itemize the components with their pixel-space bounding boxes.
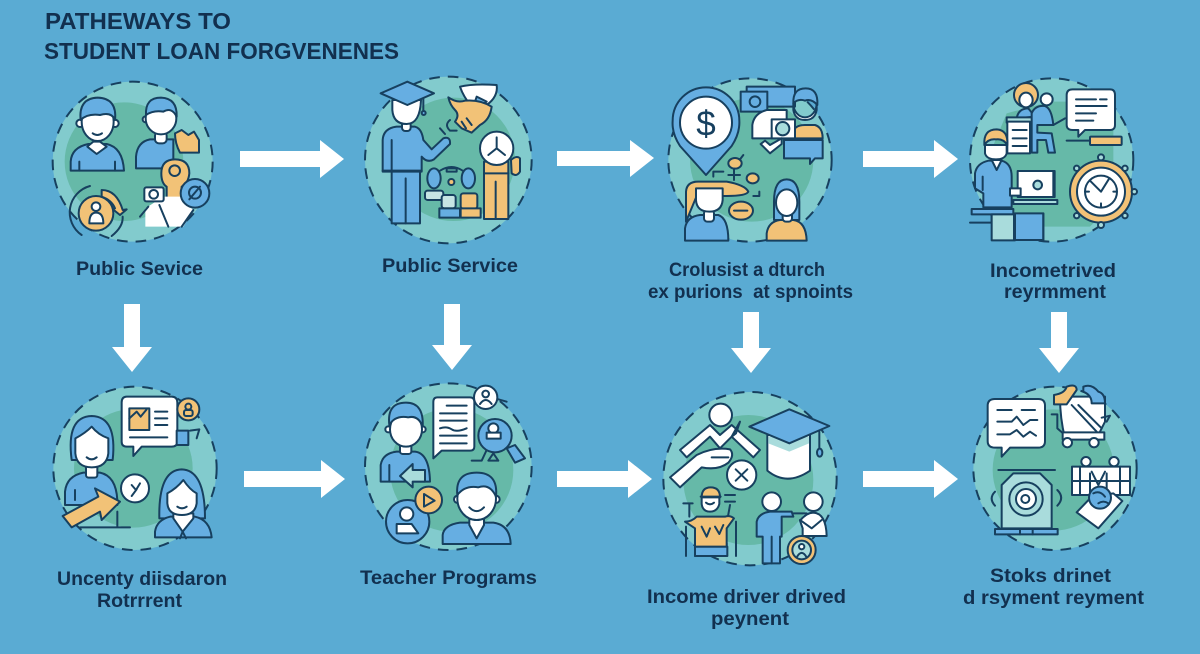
arrow: column 3 down <box>731 312 771 373</box>
label: uncenty diisdaron rotrrrent <box>57 569 227 612</box>
icon group: graduate, handshake and clock <box>365 77 532 243</box>
arrow: row 1, step 3 to 4 <box>863 140 958 178</box>
icon group: teachers, document and medal <box>365 383 532 550</box>
arrow: row 2, step 3 to 4 <box>863 460 958 498</box>
icon group: hand, graduation cap and people <box>663 392 837 565</box>
label: incometrived reyrmment: Incometrived <box>990 261 1116 282</box>
icon group: public service people <box>53 82 213 242</box>
arrow: row 1, step 1 to 2 <box>240 140 344 178</box>
panel: income driver drived peynent <box>647 392 846 630</box>
panel: uncenty diisdaron <box>53 387 227 612</box>
label: crolusist a dturch: ex purions at spnoints <box>648 282 853 303</box>
label: uncenty diisdaron rotrrrent: Uncenty diisdaron <box>57 569 227 590</box>
panel: crolusist a dturch <box>648 78 853 303</box>
label: stoks drinet drsyment reyment: Stoks drinet <box>990 566 1112 587</box>
label: income driver drived peynent: Income driver drived <box>647 587 846 608</box>
arrow: row 2, step 1 to 2 <box>244 460 345 498</box>
panel: stoks drinet <box>963 386 1145 609</box>
label: incometrived reyrmment: reyrmment <box>1004 282 1107 303</box>
icon group: dollar pin and consultants: $ <box>696 104 716 143</box>
icon group: dollar pin and consultants <box>668 78 832 242</box>
label: stoks drinet drsyment reyment: d rsyment reyment <box>963 588 1145 609</box>
label: income driver drived peynent <box>647 587 846 630</box>
panel: public service 2 <box>365 77 532 277</box>
label: crolusist a dturch <box>648 260 853 303</box>
arrow: column 1 down <box>112 304 152 372</box>
panel: teacher programs <box>360 383 537 589</box>
icon group: office worker, speech bubble and clock <box>970 78 1137 242</box>
label: teacher programs: Teacher Programs <box>360 568 537 589</box>
label: public service: Public Service <box>382 256 518 277</box>
title: STUDENT LOAN FORGVENENES <box>44 38 399 64</box>
icon group: bubble, machine, safe and globe <box>973 386 1137 550</box>
panel: income trived reyrmment <box>970 78 1137 303</box>
panel: public service 1 <box>53 82 213 280</box>
label: crolusist a dturch: Crolusist a dturch <box>669 260 825 281</box>
arrow: column 4 down <box>1039 312 1079 373</box>
label: incometrived reyrmment <box>990 261 1116 303</box>
label: uncenty diisdaron rotrrrent: Rotrrrent <box>97 591 183 612</box>
icon group: adviser, chart bubble and growth arrow <box>53 387 217 550</box>
title: PATHEWAYS TO <box>45 8 231 34</box>
label: public sevice: Public Sevice <box>76 259 203 280</box>
arrow: column 2 down <box>432 304 472 370</box>
arrow: row 2, step 2 to 3 <box>557 460 652 498</box>
arrow: row 1, step 2 to 3 <box>557 140 654 177</box>
label: stoks drinet drsyment reyment <box>963 566 1145 609</box>
label: income driver drived peynent: peynent <box>711 609 790 630</box>
title <box>44 8 399 64</box>
